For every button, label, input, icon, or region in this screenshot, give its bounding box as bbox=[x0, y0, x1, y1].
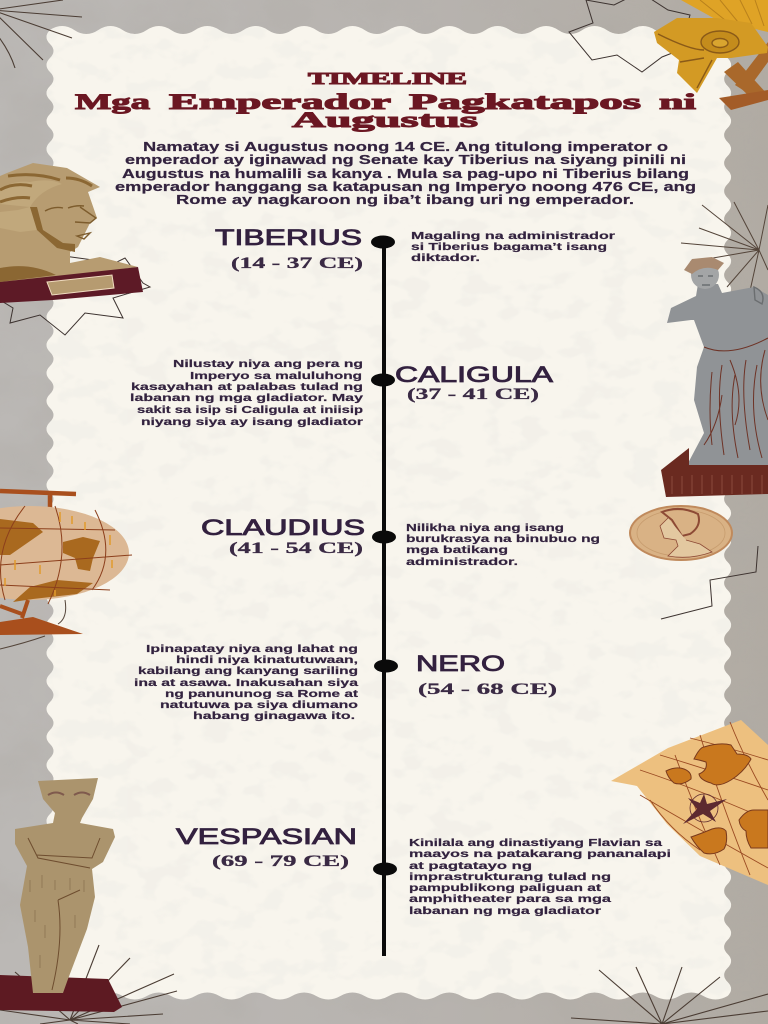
entry: Claudius description: mga batikang bbox=[406, 544, 508, 556]
icon: tan idol figure on red plinth bbox=[0, 778, 122, 1012]
entry: Caligula heading: (37 - 41 CE) bbox=[407, 386, 539, 403]
title: ni bbox=[659, 89, 696, 114]
entry: Nero description: Ipinapatay niya ang lahat ng bbox=[146, 643, 358, 655]
entry: Vespasian description: amphitheater para sa mga bbox=[409, 893, 611, 905]
entry: Vespasian description: imprastrukturang tulad ng bbox=[409, 871, 611, 883]
entry: Nero description: natutuwa pa siya diumano bbox=[160, 699, 358, 711]
entry: Tiberius description: si Tiberius bagama’t isang bbox=[411, 241, 607, 253]
entry: Tiberius heading bbox=[215, 225, 363, 272]
title: Emperador bbox=[169, 89, 391, 114]
icon: marble bust on plinth, tan bbox=[0, 163, 143, 303]
entry: Nero description bbox=[134, 643, 359, 722]
entry: Tiberius heading: (14 - 37 CE) bbox=[231, 255, 363, 272]
entry: Vespasian description: labanan ng mga gladiator bbox=[409, 905, 601, 917]
intro text block: emperador ay iginawad ng Senate kay Tiberius na siyang pinili ni bbox=[125, 153, 686, 167]
entry: Caligula heading bbox=[395, 362, 553, 403]
entry: Vespasian description: pampublikong paliguan at bbox=[409, 882, 602, 894]
starburst, bottom right bbox=[571, 967, 768, 1024]
decorative star outline, behind bust bbox=[0, 250, 150, 335]
entry: Vespasian heading bbox=[176, 824, 357, 870]
entry: Claudius description: administrador. bbox=[406, 556, 518, 568]
entry: Claudius description bbox=[406, 522, 600, 568]
zigzag line, right bbox=[661, 546, 758, 619]
entry: Tiberius description: Magaling na administrador bbox=[411, 230, 615, 242]
decorative star outline, top right bbox=[569, 0, 690, 72]
entry: Caligula description: kasayahan at palabas tulad ng bbox=[131, 381, 363, 393]
entry: Tiberius heading: TIBERIUS bbox=[215, 225, 362, 250]
entry: Caligula heading: CALIGULA bbox=[395, 362, 553, 387]
intro text block: Namatay si Augustus noong 14 CE. Ang titulong imperator o bbox=[143, 140, 669, 154]
title: TIMELINE bbox=[308, 69, 467, 88]
entry: Caligula description: sakit sa isip si Caligula at iniisip bbox=[137, 404, 363, 416]
entry: Caligula description: Nilustay niya ang pera ng bbox=[173, 358, 363, 370]
icon: grey armless statue on plinth bbox=[661, 257, 768, 497]
entry: Vespasian description: at pagtatayo ng bbox=[409, 860, 532, 872]
entry: Caligula description bbox=[130, 358, 363, 428]
entry: Vespasian description bbox=[409, 837, 671, 917]
entry: Nero heading: NERO bbox=[416, 651, 505, 676]
entry: Nero description: ng panununog sa Rome at bbox=[165, 688, 359, 700]
title: Mga bbox=[75, 89, 150, 114]
entry: Nero description: habang ginagawa ito. bbox=[193, 710, 355, 722]
entry: Nero description: kabilang ang kanyang sariling bbox=[138, 665, 358, 677]
entry: Vespasian description: maayos na patakarang pananalapi bbox=[409, 848, 671, 860]
title: Pagkatapos bbox=[409, 89, 642, 114]
icon: ancient coin with portrait bbox=[630, 506, 732, 560]
title: Augustus bbox=[292, 107, 479, 132]
entry: Claudius heading: (41 - 54 CE) bbox=[229, 540, 363, 557]
entry: Nero description: hindi niya kinatutuwaan, bbox=[176, 654, 358, 666]
starburst, top left bbox=[0, 0, 82, 68]
title bbox=[75, 69, 696, 132]
entry: Caligula description: labanan ng mga gladiator. May bbox=[130, 392, 363, 404]
intro text block: Augustus na humalili sa kanya . Mula sa pag-upo ni Tiberius bilang bbox=[122, 167, 689, 181]
icon: treasure map with compass bbox=[611, 720, 768, 885]
entry: Claudius description: Nilikha niya ang isang bbox=[406, 522, 564, 534]
entry: Vespasian heading: (69 - 79 CE) bbox=[212, 853, 349, 870]
entry: Caligula description: Imperyo sa maluluhong bbox=[190, 370, 362, 382]
entry: Claudius heading bbox=[201, 515, 365, 557]
timeline axis bbox=[371, 236, 398, 956]
entry: Nero description: ina at asawa. Inakusahan siya bbox=[134, 677, 358, 689]
starburst, bottom left bbox=[0, 945, 177, 1024]
intro text block bbox=[115, 140, 696, 207]
intro text block: emperador hanggang sa katapusan ng Imperyo noong 476 CE, ang bbox=[115, 180, 696, 194]
entry: Nero heading bbox=[416, 651, 557, 698]
intro text block: Rome ay nagkaroon ng iba’t ibang uri ng emperador. bbox=[176, 193, 634, 207]
entry: Claudius heading: CLAUDIUS bbox=[201, 515, 365, 540]
entry: Tiberius description: diktador. bbox=[411, 252, 480, 264]
entry: Claudius description: burukrasya na binubuo ng bbox=[406, 533, 600, 545]
entry: Nero heading: (54 - 68 CE) bbox=[418, 681, 557, 698]
starburst, right of statue bbox=[681, 202, 768, 300]
icon: golden helmet on stand bbox=[654, 0, 768, 110]
entry: Caligula description: niyang siya ay isang gladiator bbox=[141, 416, 363, 428]
entry: Vespasian heading: VESPASIAN bbox=[176, 824, 357, 849]
icon: globe on stand bbox=[0, 491, 132, 649]
entry: Vespasian description: Kinilala ang dinastiyang Flavian sa bbox=[409, 837, 662, 849]
entry: Tiberius description bbox=[411, 230, 615, 264]
